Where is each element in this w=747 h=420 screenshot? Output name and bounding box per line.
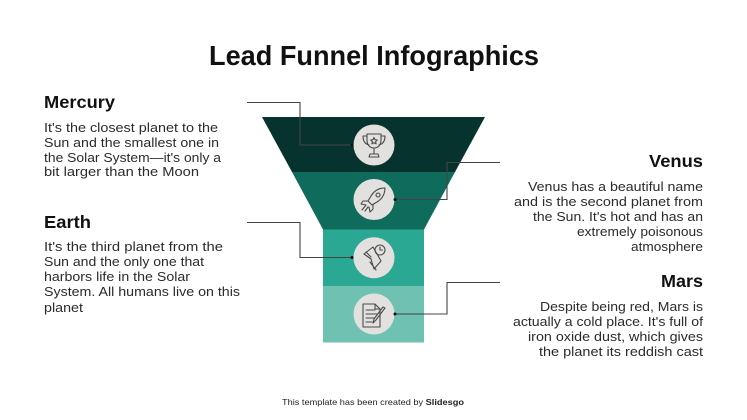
heading: Mercury: Mercury [44, 92, 115, 112]
body: Earth: System. All humans live on this [44, 284, 241, 299]
text block: Mercury [44, 92, 222, 179]
body: Mercury: Sun and the smallest one in [44, 135, 219, 150]
body: Venus: the Sun. It's hot and has an [533, 209, 703, 224]
body: Venus [514, 179, 704, 254]
heading: Mars: Mars [661, 271, 703, 291]
body: Venus: and is the second planet from [514, 194, 703, 209]
text block: Mars [513, 271, 704, 359]
footer credit: This template has been created by Slidesgo [282, 397, 464, 407]
body: Earth: harbors life in the Solar [44, 269, 191, 284]
funnel level 2 [292, 172, 455, 230]
text block: Earth [44, 212, 241, 315]
body: Mars: iron oxide dust, which gives [528, 329, 704, 344]
body: Mercury [44, 120, 222, 179]
body: Venus: Venus has a beautiful name [528, 179, 703, 194]
funnel level 3 [323, 230, 424, 286]
connector: Venus [394, 162, 500, 201]
funnel level 4 [323, 286, 424, 342]
body: Earth: It's the third planet from the [44, 239, 223, 254]
icon: document and pen [354, 294, 394, 334]
connector: Earth [247, 222, 354, 259]
icon: trophy [354, 124, 394, 166]
body: Mars: actually a cold place. It's full of [513, 314, 703, 329]
heading: Venus: Venus [649, 151, 703, 171]
icon: hourglass and clock [354, 237, 394, 278]
body: Mercury: bit larger than the Moon [44, 164, 199, 179]
body: Mars: Despite being red, Mars is [540, 299, 704, 314]
body: Mars: the planet its reddish cast [539, 344, 703, 359]
funnel [262, 117, 485, 342]
connector: Mars [394, 282, 500, 316]
body: Mars [513, 299, 704, 359]
text block: Venus [514, 151, 704, 254]
connector: Mercury [247, 102, 354, 146]
body: Mercury: It's the closest planet to the [44, 120, 218, 135]
funnel level 1 [262, 117, 485, 172]
body: Venus: extremely poisonous [577, 224, 704, 239]
title: Lead Funnel Infographics [209, 40, 539, 71]
body: Earth: Sun and the only one that [44, 254, 204, 269]
body: Earth: planet [44, 300, 83, 315]
body: Earth [44, 239, 241, 315]
body: Venus: atmosphere [631, 239, 703, 254]
body: Mercury: the Solar System—it's only a [44, 150, 222, 165]
icon: rocket [354, 179, 394, 220]
heading: Earth: Earth [44, 212, 91, 232]
